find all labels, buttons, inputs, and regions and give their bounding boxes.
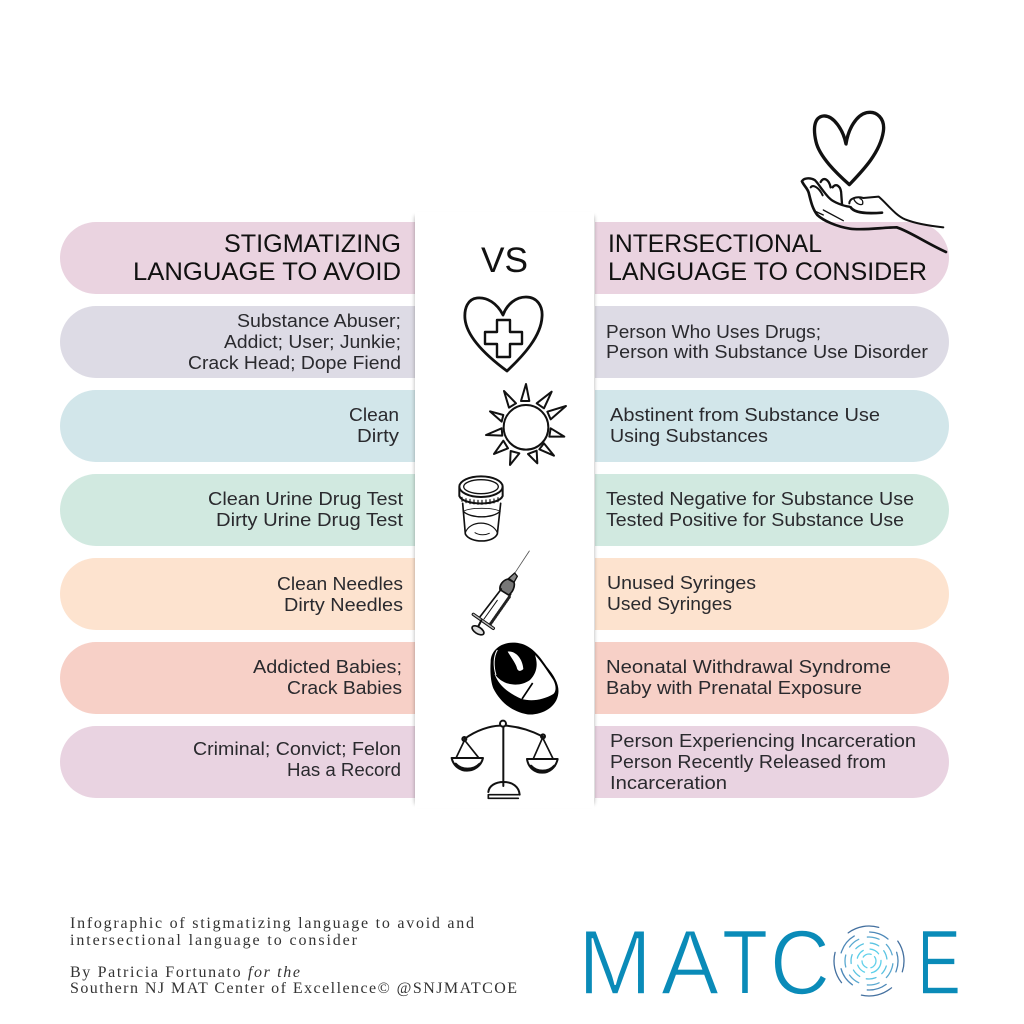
right text: incarceration: Incarceration — [610, 772, 727, 793]
left text: substance abuser — [188, 310, 401, 373]
logo: MATCOE: A — [661, 912, 720, 1014]
center white column — [415, 212, 594, 808]
left text: clean dirty: Dirty — [357, 425, 400, 446]
left text: clean dirty — [349, 404, 400, 446]
left text: substance abuser: Crack Head; Dope Fiend — [188, 352, 401, 373]
left text: needles: Dirty Needles — [284, 594, 403, 615]
icon: urine specimen cup — [459, 476, 503, 541]
heading: stigmatizing language to avoid: LANGUAGE TO AVOID — [133, 258, 401, 286]
right text: person who uses drugs — [606, 321, 928, 362]
right column pills — [595, 222, 949, 798]
left text: babies — [253, 656, 402, 698]
icon: syringe — [471, 551, 529, 637]
left text: clean dirty: Clean — [349, 404, 399, 425]
logo: MATCOE: M — [578, 912, 652, 1014]
logo mark: concentric rings — [820, 912, 918, 1010]
logo: MATCOE: E — [917, 912, 961, 1014]
left text: needles — [277, 573, 403, 615]
right text: tested — [606, 488, 914, 530]
right text: syringes: Used Syringes — [607, 593, 732, 614]
footer credit text: Infographic of stigmatizing language to avoid and — [70, 915, 474, 932]
right text: incarceration — [610, 730, 916, 793]
left text: needles: Clean Needles — [277, 573, 403, 594]
right text: abstinent — [610, 404, 880, 446]
left text: criminal: Criminal; Convict; Felon — [193, 738, 401, 759]
left text: urine drug test: Clean Urine Drug Test — [208, 488, 403, 509]
left text: urine drug test — [208, 488, 403, 530]
footer credit text: By Patricia Fortunato for the — [70, 964, 300, 981]
right text: neonatal: Baby with Prenatal Exposure — [606, 677, 862, 698]
right text: incarceration: Person Recently Released from — [610, 751, 886, 772]
left text: babies: Crack Babies — [287, 677, 402, 698]
icon: scales of justice — [452, 721, 558, 798]
icon: heart with medical cross — [465, 297, 542, 371]
left text: urine drug test: Dirty Urine Drug Test — [216, 509, 403, 530]
footer credit text: Southern NJ MAT Center of Excellence© @SNJMATCOE — [70, 980, 517, 997]
logo: MATCOE — [578, 912, 961, 1014]
logo: MATCOE: C — [770, 912, 830, 1014]
heading: stigmatizing language to avoid: STIGMATIZING — [224, 230, 401, 258]
heading: intersectional language to consider: INTERSECTIONAL — [608, 230, 822, 258]
left text: criminal: Has a Record — [287, 759, 401, 780]
left text: substance abuser: Addict; User; Junkie; — [224, 331, 401, 352]
heading: stigmatizing language to avoid — [133, 230, 401, 286]
heading: VS: VS — [481, 241, 528, 280]
left text: babies: Addicted Babies; — [253, 656, 402, 677]
left text: substance abuser: Substance Abuser; — [237, 310, 401, 331]
left column pills — [60, 222, 415, 798]
right text: abstinent: Using Substances — [610, 425, 768, 446]
icon: sun — [486, 384, 566, 465]
heading: intersectional language to consider — [608, 230, 927, 286]
right text: neonatal: Neonatal Withdrawal Syndrome — [606, 656, 891, 677]
right text: person who uses drugs: Person with Substance Use Disorder — [606, 341, 928, 362]
right text: person who uses drugs: Person Who Uses Drugs; — [606, 321, 821, 342]
right text: tested: Tested Negative for Substance Use — [606, 488, 914, 509]
icon: swaddled baby — [490, 643, 558, 714]
icon: heart and hand — [802, 112, 946, 252]
right text: neonatal — [606, 656, 891, 698]
heading: intersectional language to consider: LANGUAGE TO CONSIDER — [608, 258, 927, 286]
right text: abstinent: Abstinent from Substance Use — [610, 404, 880, 425]
footer credit text: intersectional language to consider — [70, 932, 358, 949]
right text: syringes: Unused Syringes — [607, 572, 756, 593]
left text: criminal — [193, 738, 401, 780]
right text: syringes — [607, 572, 756, 614]
right text: tested: Tested Positive for Substance Use — [606, 509, 904, 530]
logo: MATCOE: T — [722, 912, 768, 1014]
footer credit text — [70, 915, 517, 997]
right text: incarceration: Person Experiencing Incarceration — [610, 730, 916, 751]
